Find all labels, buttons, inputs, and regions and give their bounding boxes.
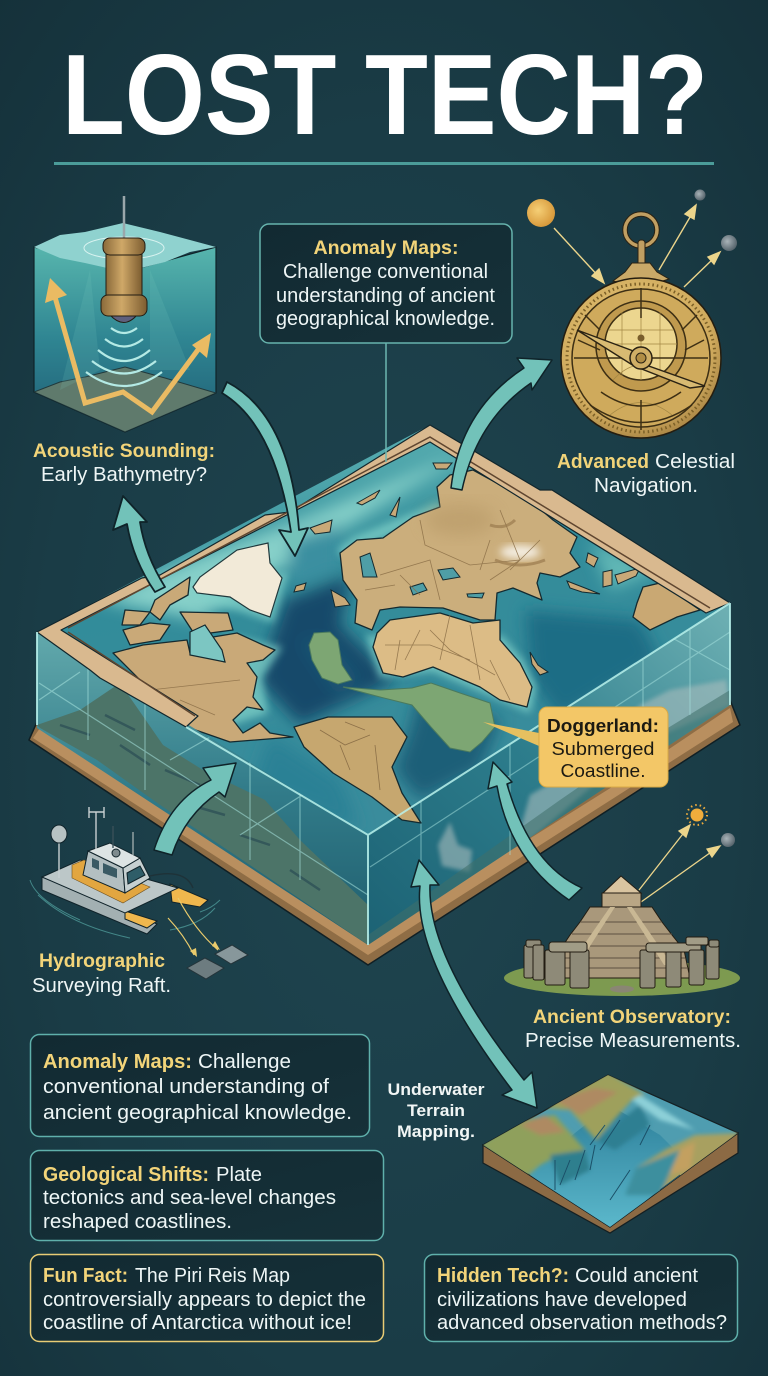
icon: underwater terrain block bbox=[480, 1072, 742, 1233]
islands bbox=[294, 463, 640, 675]
label: advanced celestial navigation: Celestial bbox=[655, 451, 735, 473]
panel: geological shifts: reshaped coastlines. bbox=[43, 1211, 232, 1233]
icon: sonar cube bbox=[34, 196, 216, 432]
mast and sensors bbox=[59, 807, 193, 888]
map surface: ocean and continents bbox=[37, 425, 730, 835]
callout: doggerland: Submerged bbox=[552, 738, 654, 759]
label: hydrographic surveying raft: Surveying Raft. bbox=[32, 975, 171, 997]
label: hydrographic surveying raft bbox=[32, 950, 171, 997]
panel: hidden tech bbox=[424, 1254, 738, 1342]
Hudson Bay bbox=[190, 625, 225, 662]
continent: Greenland bbox=[193, 543, 282, 617]
label: acoustic sounding bbox=[33, 440, 215, 486]
panel: anomaly maps bbox=[30, 1034, 370, 1136]
water channels bbox=[530, 1112, 672, 1227]
callout: doggerland bbox=[483, 707, 668, 787]
label: acoustic sounding: Early Bathymetry? bbox=[41, 464, 207, 486]
glass edges bbox=[37, 603, 730, 945]
panel: hidden tech: Could ancient bbox=[575, 1265, 698, 1287]
panel: anomaly maps callout: understanding of ancient bbox=[276, 285, 495, 307]
continent: Doggerland green bbox=[309, 632, 495, 752]
continent: South America bbox=[294, 717, 421, 823]
inland seas bbox=[360, 553, 484, 598]
coastal halos bbox=[197, 507, 532, 720]
wooden map frame bbox=[37, 425, 730, 727]
cabin bbox=[83, 851, 125, 893]
label: hydrographic surveying raft: Hydrographic bbox=[39, 950, 165, 972]
panel: anomaly maps callout: Challenge conventional bbox=[283, 261, 488, 283]
label: underwater terrain mapping bbox=[388, 1080, 485, 1141]
icon: ancient observatory bbox=[504, 805, 740, 996]
sight lines bbox=[554, 205, 720, 287]
transducer bbox=[101, 196, 147, 322]
water surface bbox=[34, 223, 216, 272]
arrow: sonar to map bbox=[222, 382, 308, 556]
arrow: map to acoustic sounding bbox=[113, 496, 165, 592]
label: acoustic sounding: Acoustic Sounding: bbox=[33, 440, 215, 462]
panel: hidden tech: advanced observation methods? bbox=[437, 1312, 727, 1334]
panel: anomaly maps: Challenge bbox=[198, 1051, 291, 1073]
right pontoon bbox=[170, 884, 208, 907]
label: advanced celestial navigation bbox=[557, 451, 735, 497]
water ripples bbox=[30, 880, 220, 938]
panel: geological shifts: Plate bbox=[216, 1164, 262, 1186]
continent: North America bbox=[113, 577, 293, 742]
label: ancient observatory: Ancient Observatory: bbox=[533, 1006, 731, 1028]
towed sensors bbox=[168, 898, 218, 955]
label: underwater terrain mapping: Underwater bbox=[388, 1080, 485, 1099]
panel: fun fact: Fun Fact: bbox=[43, 1265, 128, 1287]
title: LOST TECH? bbox=[62, 32, 708, 159]
panel: anomaly maps callout bbox=[260, 224, 512, 343]
continent: Eurasia bbox=[340, 470, 580, 630]
label: underwater terrain mapping: Mapping. bbox=[397, 1122, 475, 1141]
panel: fun fact: coastline of Antarctica without ice! bbox=[43, 1312, 352, 1334]
continent: Australia bbox=[633, 583, 700, 630]
label: underwater terrain mapping: Terrain bbox=[407, 1101, 465, 1120]
standing stones bbox=[524, 937, 719, 988]
land detail bbox=[150, 510, 540, 715]
panel: hidden tech: Hidden Tech?: bbox=[437, 1265, 569, 1287]
continent: Africa bbox=[373, 613, 532, 707]
arrow: observatory to map bbox=[488, 762, 582, 900]
sun bbox=[687, 805, 707, 825]
icon: hydrographic raft bbox=[30, 807, 248, 979]
arrow: double headed terrain arrow bbox=[411, 860, 537, 1108]
panel: geological shifts: Geological Shifts: bbox=[43, 1164, 209, 1186]
glass wall left bbox=[37, 632, 368, 945]
panel: hidden tech: civilizations have developed bbox=[437, 1289, 687, 1311]
panel: fun fact bbox=[30, 1254, 384, 1342]
panel: anomaly maps: Anomaly Maps: bbox=[43, 1051, 192, 1073]
panel: anomaly maps: conventional understanding of bbox=[43, 1076, 329, 1098]
hull side bbox=[42, 877, 157, 934]
arrow: map to astrolabe bbox=[451, 358, 552, 490]
stepped pyramid bbox=[603, 876, 641, 893]
seabed bbox=[34, 291, 216, 432]
callout: doggerland: Coastline. bbox=[560, 760, 646, 781]
map base bbox=[29, 700, 740, 965]
panel: geological shifts: tectonics and sea-level changes bbox=[43, 1187, 336, 1209]
panel: anomaly maps callout: Anomaly Maps: bbox=[314, 237, 458, 259]
icon: astrolabe bbox=[527, 190, 737, 438]
panel: geological shifts bbox=[30, 1150, 384, 1240]
connector: anomaly box to map bbox=[385, 343, 387, 462]
label: advanced celestial navigation: Navigation. bbox=[594, 475, 698, 497]
panel: fun fact: The Piri Reis Map bbox=[135, 1265, 290, 1287]
arrow: raft to map bbox=[154, 763, 236, 855]
highlands bbox=[480, 1072, 742, 1195]
glass wall right bbox=[368, 603, 730, 945]
celestial bodies bbox=[527, 199, 555, 227]
label: advanced celestial navigation: Advanced bbox=[557, 451, 649, 473]
sound path arrows bbox=[45, 278, 211, 412]
shallow and deep water bbox=[100, 450, 660, 830]
panel: central map platform bbox=[29, 425, 740, 965]
front pontoon bbox=[125, 911, 157, 928]
panel: fun fact: controversially appears to depict the bbox=[43, 1289, 366, 1311]
label: ancient observatory: Precise Measurements. bbox=[525, 1030, 741, 1052]
panel: anomaly maps: ancient geographical knowledge. bbox=[43, 1102, 352, 1124]
deck bbox=[42, 860, 178, 913]
echo waves bbox=[86, 328, 162, 386]
label: ancient observatory bbox=[525, 1006, 741, 1052]
callout: doggerland: Doggerland: bbox=[547, 716, 659, 736]
panel: anomaly maps callout: geographical knowledge. bbox=[276, 308, 495, 330]
